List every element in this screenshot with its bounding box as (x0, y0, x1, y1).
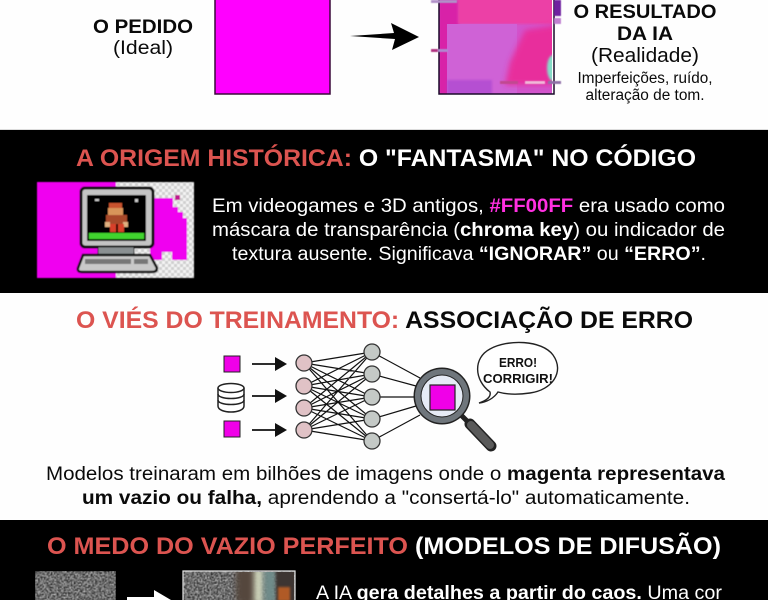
callout: erro corrigir: CORRIGIR! (483, 371, 553, 386)
panel: o medo do vazio perfeito (0, 520, 768, 600)
input squares (224, 356, 240, 437)
magenta ideal square (215, 0, 330, 94)
text: origem historica: máscara de transparência ( chroma key ) ou indicador de (212, 220, 725, 241)
heading: medo do vazio: O MEDO DO VAZIO PERFEITO (MODELOS DE DIFUSÃO) (47, 532, 721, 560)
label: o resultado da ia: alteração de tom. (586, 87, 704, 104)
panel: a origem historica (0, 130, 768, 293)
heading: origem historica: A ORIGEM HISTÓRICA: O "FANTASMA" NO CÓDIGO (76, 144, 696, 172)
image: noise (35, 571, 116, 600)
text: origem historica: textura ausente. Significava “IGNORAR” ou “ERRO”. (232, 244, 706, 265)
icon: magnifying glass (414, 368, 491, 446)
label: o pedido (93, 17, 193, 59)
neck (98, 247, 134, 255)
hidden nodes (364, 344, 380, 449)
label: o pedido: O PEDIDO (93, 17, 193, 38)
heading: vies do treinamento: O VIÉS DO TREINAMENTO: ASSOCIAÇÃO DE ERRO (76, 306, 693, 334)
input arrows (252, 357, 287, 437)
keyboard (78, 255, 157, 272)
text: vies do treinamento: um vazio ou falha, aprendendo a "consertá-lo" automaticamente. (82, 488, 690, 509)
text: origem historica (212, 196, 725, 265)
label: o resultado da ia (574, 1, 716, 104)
callout: erro corrigir: ERRO! (499, 355, 537, 370)
text: origem historica: Em videogames e 3D antigos, #FF00FF era usado como (212, 196, 725, 217)
callout: erro corrigir (478, 342, 558, 403)
input nodes (296, 355, 312, 438)
diagram: neural network (218, 342, 558, 449)
label: o resultado da ia: (Realidade) (591, 45, 699, 67)
panel: o vies do treinamento (0, 293, 768, 520)
icon: database (218, 384, 244, 412)
label: o resultado da ia: Imperfeições, ruído, (578, 70, 712, 87)
image: partially denoised (183, 568, 296, 600)
text: vies do treinamento (46, 464, 725, 509)
label: o resultado da ia: DA IA (617, 23, 673, 45)
panel: pedido vs resultado (0, 0, 768, 130)
arrow (127, 590, 171, 600)
image: retro computer on magenta and checker (37, 182, 194, 278)
network connections (304, 352, 420, 441)
label: o resultado da ia: O RESULTADO (574, 1, 716, 23)
monitor (81, 188, 153, 247)
label: o pedido: (Ideal) (113, 38, 173, 59)
text: vies do treinamento: Modelos treinaram em bilhões de imagens onde o magenta representava (46, 464, 725, 485)
arrow (350, 23, 419, 50)
result image: distorted magenta (431, 0, 561, 94)
